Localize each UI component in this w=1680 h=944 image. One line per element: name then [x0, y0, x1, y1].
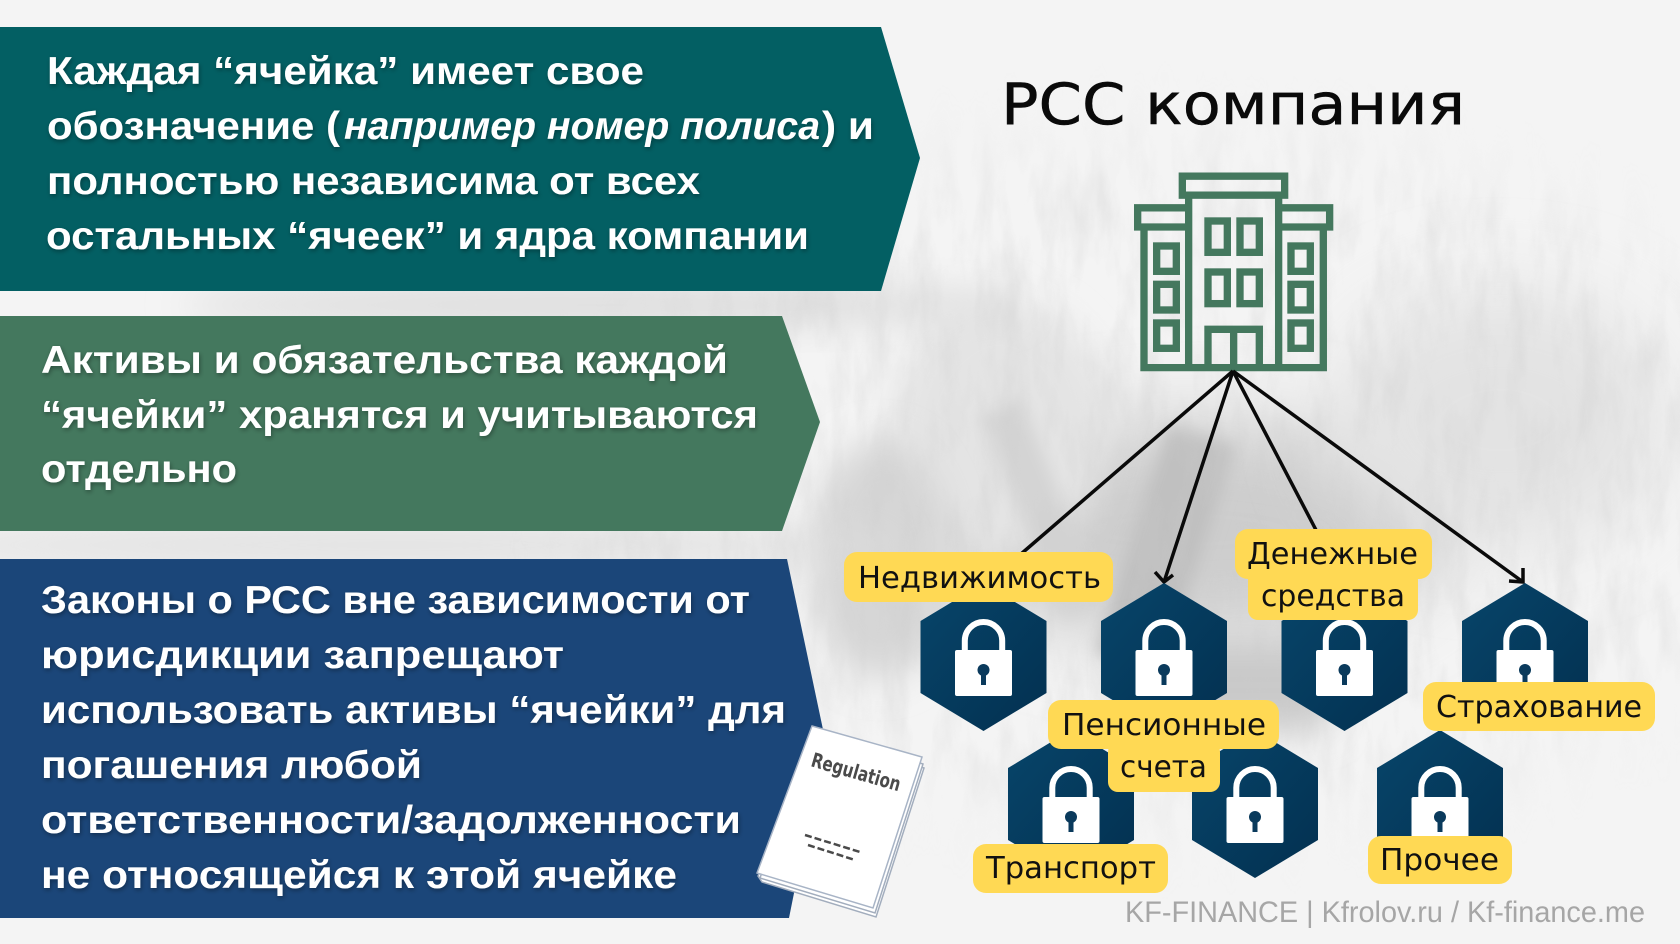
panel 1 text	[46, 50, 874, 258]
icon: company building	[1138, 176, 1330, 368]
label: Прочее: Прочее	[1380, 843, 1499, 878]
panel 2 text: “ячейки” хранятся и учитываются	[41, 394, 758, 437]
panel 3 text: использовать активы “ячейки” для	[41, 689, 786, 732]
cell: hexagons with locks row 1	[920, 583, 1588, 731]
label: Недвижимость: Недвижимость	[858, 561, 1101, 596]
panel 3: PCC laws	[0, 559, 825, 918]
panel 3 text: юрисдикции запрещают	[41, 634, 564, 677]
label: Транспорт	[973, 844, 1168, 893]
panel 1 text: например номер полиса	[344, 105, 820, 148]
panel 1 text: полностью независима от всех	[47, 160, 700, 203]
panel 2: assets and liabilities	[0, 316, 820, 531]
cell: hexagons with locks row 2	[1008, 730, 1503, 878]
label: Прочее	[1368, 836, 1512, 884]
icon: regulation document	[757, 726, 924, 917]
panel 3 text: не относящейся к этой ячейке	[41, 854, 677, 897]
panel 3 text: Законы о РСС вне зависимости от	[41, 579, 750, 622]
label: Пенсионные счета	[1048, 700, 1279, 792]
label: Недвижимость	[844, 552, 1113, 602]
label: Денежные средства	[1235, 529, 1432, 620]
panel 1 text: остальных “ячеек” и ядра компании	[46, 215, 809, 258]
footer credit: KF-FINANCE | Kfrolov.ru / Kf-finance.me	[1125, 896, 1645, 929]
icon: regulation document: Regulation	[809, 748, 904, 796]
panel 3 text	[41, 579, 786, 897]
label: Пенсионные счета: Пенсионные	[1062, 708, 1266, 743]
panel 2 text	[41, 339, 758, 491]
panel 2 text: отдельно	[41, 448, 237, 491]
label: Денежные средства: средства	[1261, 579, 1405, 614]
label: Страхование	[1423, 682, 1655, 731]
panel 2 text: Активы и обязательства каждой	[41, 339, 728, 382]
panel 1 text: ) и	[822, 105, 874, 148]
panel 1 text: Каждая “ячейка” имеет свое	[47, 50, 644, 93]
label: Страхование: Страхование	[1436, 690, 1642, 725]
background texture	[0, 170, 1680, 774]
title: РСС компания	[1001, 72, 1465, 138]
label: Транспорт: Транспорт	[985, 851, 1156, 886]
label: Пенсионные счета: счета	[1120, 750, 1207, 785]
arrows from company to cells	[1021, 371, 1523, 582]
panel 3 text: погашения любой	[41, 744, 422, 787]
panel 1 text: обозначение (	[47, 105, 340, 148]
panel 1: cell designation	[0, 27, 920, 291]
label: Денежные средства: Денежные	[1247, 537, 1418, 572]
panel 3 text: ответственности/задолженности	[41, 799, 741, 842]
